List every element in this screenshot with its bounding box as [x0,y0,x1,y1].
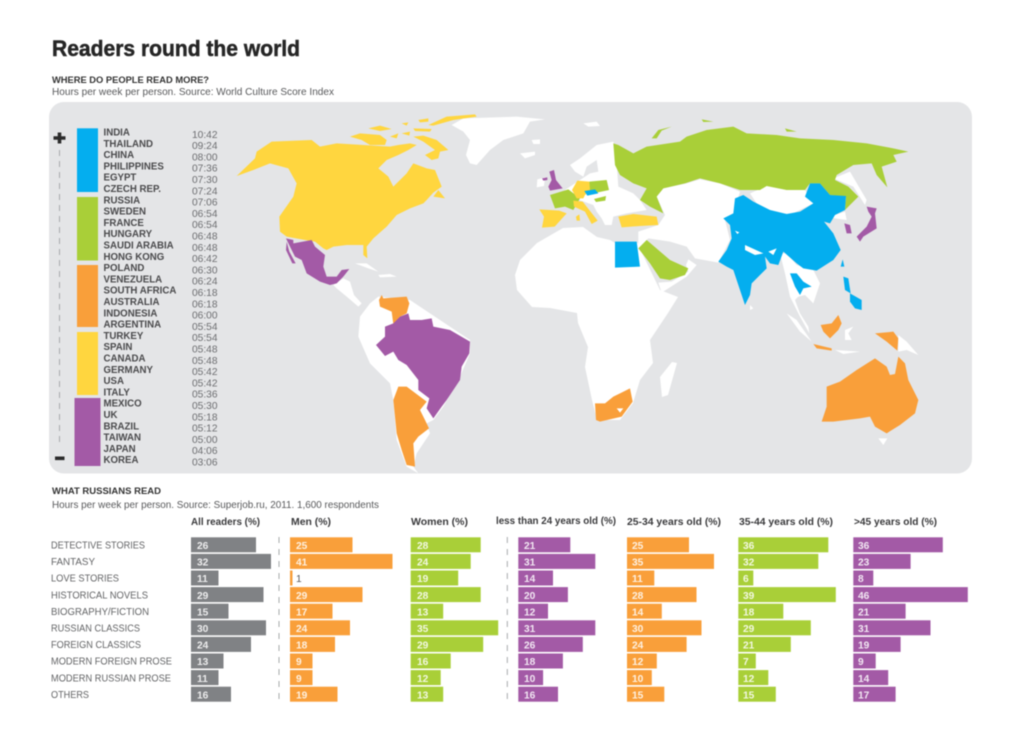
map: South Africa [595,388,633,422]
legend: reading times: 05:42 [192,367,218,378]
legend: country names: AUSTRALIA [104,297,159,308]
legend: reading times: 05:54 [192,333,218,344]
bar chart: 25-34 years old [627,537,714,702]
bar chart: less than 24 years old: 18 [524,657,536,668]
bar chart: women: 35 [417,624,429,635]
genre row labels: RUSSIAN CLASSICS [51,624,140,634]
legend: reading times: 05:48 [192,344,218,356]
legend: reading times: 05:36 [192,390,218,401]
map: Africa [515,227,678,420]
icon: minus [55,456,64,460]
map: Philippines [843,277,851,293]
bar chart: 25-34 years old: 30 [632,624,644,635]
bar chart: all readers: 24 [197,641,209,652]
bar chart: 35-44 years old: 39 [743,591,755,602]
legend: reading times: 06:54 [192,220,218,231]
map: Japan [857,207,877,242]
bar chart: 35-44 years old [738,537,836,702]
bar chart: women [411,537,498,702]
legend: reading times [192,130,218,469]
genre row labels: DETECTIVE STORIES [51,540,145,552]
bar chart: less than 24 years old: 31 [524,624,536,635]
legend: country names: CANADA [104,354,145,364]
bar chart: men: 18 [296,641,308,652]
map: Turkey [618,214,658,227]
column headers: 35-44 years old (%) [739,517,833,528]
legend: country names: SWEDEN [104,207,146,218]
bar chart: 25-34 years old: 10 [632,674,644,685]
bar chart: all readers: 29 [197,591,209,602]
legend: country names: KOREA [104,455,138,466]
bar chart: 35-44 years old: 18 [743,607,755,618]
legend: reading times: 05:54 [192,322,218,333]
map: Mexico [286,238,349,285]
bar chart: 25-34 years old: 12 [632,657,644,668]
legend: country names: ITALY [104,387,130,398]
legend: country names: PHILIPPINES [104,161,164,172]
legend: reading times: 06:18 [192,299,218,310]
bar chart: 25-34 years old: 24 [632,641,644,652]
genre row labels: OTHERS [51,690,89,701]
legend: reading times: 05:18 [192,412,218,423]
bar chart: men: 29 [296,591,308,602]
title: Readers round the world [52,36,300,61]
world map [237,114,918,473]
legend: reading times: 05:00 [192,435,218,446]
legend: reading times: 06:42 [192,254,218,265]
legend: country names: RUSSIA [104,195,140,206]
map: Taiwan [841,259,844,267]
legend: country names: VENEZUELA [104,274,162,285]
map: Venezuela [379,295,409,324]
legend: reading times: 05:42 [192,378,218,389]
legend: reading times: 06:54 [192,209,218,220]
bar chart: 25-34 years old: 28 [632,591,644,602]
column headers: Women (%) [411,517,468,528]
legend: country names: MEXICO [104,399,142,410]
bar chart: 35-44 years old: 29 [743,624,755,635]
column headers: All readers (%) [191,517,260,528]
legend: country names: POLAND [104,263,144,274]
column headers: >45 years old (%) [854,517,937,528]
bar chart: 35-44 years old: 15 [743,690,755,701]
legend: country names: ARGENTINA [104,320,161,331]
legend: country names: FRANCE [104,218,144,229]
legend: colour bands [74,128,100,466]
bar chart: over 45 years old: 14 [858,674,870,685]
bar chart: women: 24 [417,558,429,569]
subheading: map source: Hours per week per person. Source: World Culture Score Index [52,87,334,98]
legend: country names: USA [104,376,124,387]
map: Korea [844,223,852,233]
legend: country names: EGYPT [104,173,136,184]
bar chart: 25-34 years old: 35 [632,558,644,569]
bar chart: men: 17 [296,607,308,618]
bar chart: over 45 years old: 23 [858,558,870,569]
bar chart: 35-44 years old: 32 [743,558,755,569]
legend: reading times: 06:18 [192,288,218,299]
legend: country names: BRAZIL [104,421,139,432]
bar chart: all readers: 13 [197,657,209,668]
bar chart: all readers: 15 [197,607,209,618]
legend: country names: HONG KONG [104,252,164,263]
genre row labels: LOVE STORIES [51,574,119,585]
bar chart: less than 24 years old: 20 [524,591,536,602]
legend: reading times: 10:42 [192,130,218,141]
legend: reading times: 09:24 [192,141,218,152]
bar chart: 35-44 years old: 21 [743,641,755,652]
legend: reading times: 07:30 [192,175,218,186]
bar chart: less than 24 years old: 10 [524,674,536,685]
legend: reading times: 04:06 [192,446,218,457]
legend: country names: CHINA [104,150,134,161]
subheading: survey source: Hours per week per person. Source: Superjob.ru, 2011. 1,600 respondents [52,500,379,511]
legend: reading times: 06:30 [192,265,218,276]
genre row labels: HISTORICAL NOVELS [51,590,148,601]
bar chart: over 45 years old: 9 [858,657,864,668]
column headers [191,516,937,528]
bar chart: men: 25 [296,541,308,552]
map: Asia, Oceania and Africa's south [595,119,918,445]
map: Indonesia [821,315,842,338]
map: Argentina [393,387,429,467]
bar chart: 35-44 years old: 6 [743,574,749,585]
bar chart: over 45 years old: 17 [858,690,870,701]
bar chart: all readers: 32 [197,558,209,569]
legend: country names: THAILAND [104,139,153,150]
bar chart: women: 28 [417,591,429,602]
map: Saudi Arabia [638,240,688,280]
icon: plus [54,132,66,144]
bar chart: all readers: 30 [197,624,209,635]
legend: reading times: 05:30 [192,401,218,412]
bar chart: 35-44 years old: 36 [743,541,755,552]
bar chart: women: 16 [417,657,429,668]
bar chart: all readers: 11 [197,674,208,685]
bar chart: men: 1 [296,574,302,585]
column headers: Men (%) [291,517,331,528]
bar chart: 25-34 years old: 15 [632,690,644,701]
legend: country names [104,128,176,466]
map: Madagascar [660,362,677,397]
bar chart: over 45 years old: 31 [858,624,870,635]
legend: country names: INDIA [104,128,130,138]
bar chart: women: 13 [417,690,429,701]
legend: reading times: 07:24 [192,186,218,197]
bar chart: over 45 years old: 46 [858,591,870,602]
bar chart: 25-34 years old: 11 [632,574,643,585]
bar chart: less than 24 years old: 14 [524,574,536,585]
bar chart: 35-44 years old: 7 [743,657,749,668]
genre row labels: FOREIGN CLASSICS [51,640,141,651]
column headers: 25-34 years old (%) [627,517,721,528]
genre row labels: FANTASY [51,557,95,568]
legend: country names: SPAIN [104,342,132,353]
legend: country names: TAIWAN [104,433,141,444]
legend: reading times: 07:06 [192,198,218,209]
bar chart: all readers: 16 [197,690,209,701]
bar chart: women: 13 [417,607,429,618]
bar chart: less than 24 years old: 26 [524,641,536,652]
panel: world map background [49,102,972,474]
bar chart: over 45 years old: 8 [858,574,864,585]
legend: reading times: 03:06 [192,458,218,468]
legend: country names: CZECH REP. [104,184,161,195]
bar chart: men: 9 [296,657,302,668]
map: Egypt [615,242,640,268]
legend: reading times: 06:00 [192,311,218,322]
bar chart: less than 24 years old: 21 [524,541,536,552]
map: Russia [613,127,908,213]
bar chart: women: 28 [417,541,429,552]
legend: reading times: 06:48 [192,232,218,242]
map: Americas and Greenland [237,114,600,473]
bar chart: 35-44 years old: 12 [743,674,755,685]
bar chart: less than 24 years old: 12 [524,607,536,618]
bar chart: men [290,537,392,702]
heading: where do people read more: WHERE DO PEOPLE READ MORE? [52,75,209,85]
bar chart: all readers: 11 [197,574,208,585]
bar chart: less than 24 years old: 31 [524,558,536,569]
map: Brazil [376,313,470,418]
bar chart: men: 19 [296,690,308,701]
bar chart: over 45 years old: 19 [858,641,870,652]
legend: reading times: 05:12 [192,424,218,435]
heading: what Russians read: WHAT RUSSIANS READ [52,486,161,496]
bar chart: women: 29 [417,641,429,652]
bar chart: men: 24 [296,624,308,635]
bar chart: over 45 years old: 21 [858,607,870,618]
bar chart: women: 12 [417,674,429,685]
legend: reading times: 06:24 [192,277,218,288]
legend: country names: UK [104,410,118,421]
legend: reading times: 06:48 [192,243,218,254]
bar chart: women: 19 [417,574,429,585]
map: China and India [718,183,846,305]
bar chart: 25-34 years old: 14 [632,607,644,618]
legend: country names: HUNGARY [104,229,153,240]
genre row labels [51,540,172,701]
genre row labels: BIOGRAPHY/FICTION [51,607,149,618]
legend: reading times: 05:48 [192,356,218,367]
bar chart: men: 41 [296,558,308,569]
legend: country names: JAPAN [104,444,136,455]
column headers: less than 24 years old (%) [496,516,616,527]
bar chart: less than 24 years old: 16 [524,690,536,701]
bar chart: less than 24 years old [518,537,595,702]
map: Thailand [790,273,812,295]
map: Europe [532,139,647,228]
bar chart: men: 9 [296,674,302,685]
bar chart: over 45 years old [853,537,968,702]
bar chart: all readers: 26 [197,541,209,552]
legend: country names: SOUTH AFRICA [104,286,176,297]
legend: country names: INDONESIA [104,308,157,319]
legend: scale marks [54,132,66,460]
bar chart: all readers [191,537,271,702]
legend: reading times: 08:00 [192,152,218,163]
legend: country names: GERMANY [104,365,154,376]
bar chart: 25-34 years old: 25 [632,541,644,552]
map: Australia [822,357,918,433]
genre row labels: MODERN FOREIGN PROSE [51,657,172,668]
genre row labels: MODERN RUSSIAN PROSE [51,673,171,684]
legend: country names: TURKEY [104,331,144,342]
legend: country names: SAUDI ARABIA [104,240,174,252]
legend: reading times: 07:36 [192,164,218,175]
bar chart: over 45 years old: 36 [858,541,870,552]
